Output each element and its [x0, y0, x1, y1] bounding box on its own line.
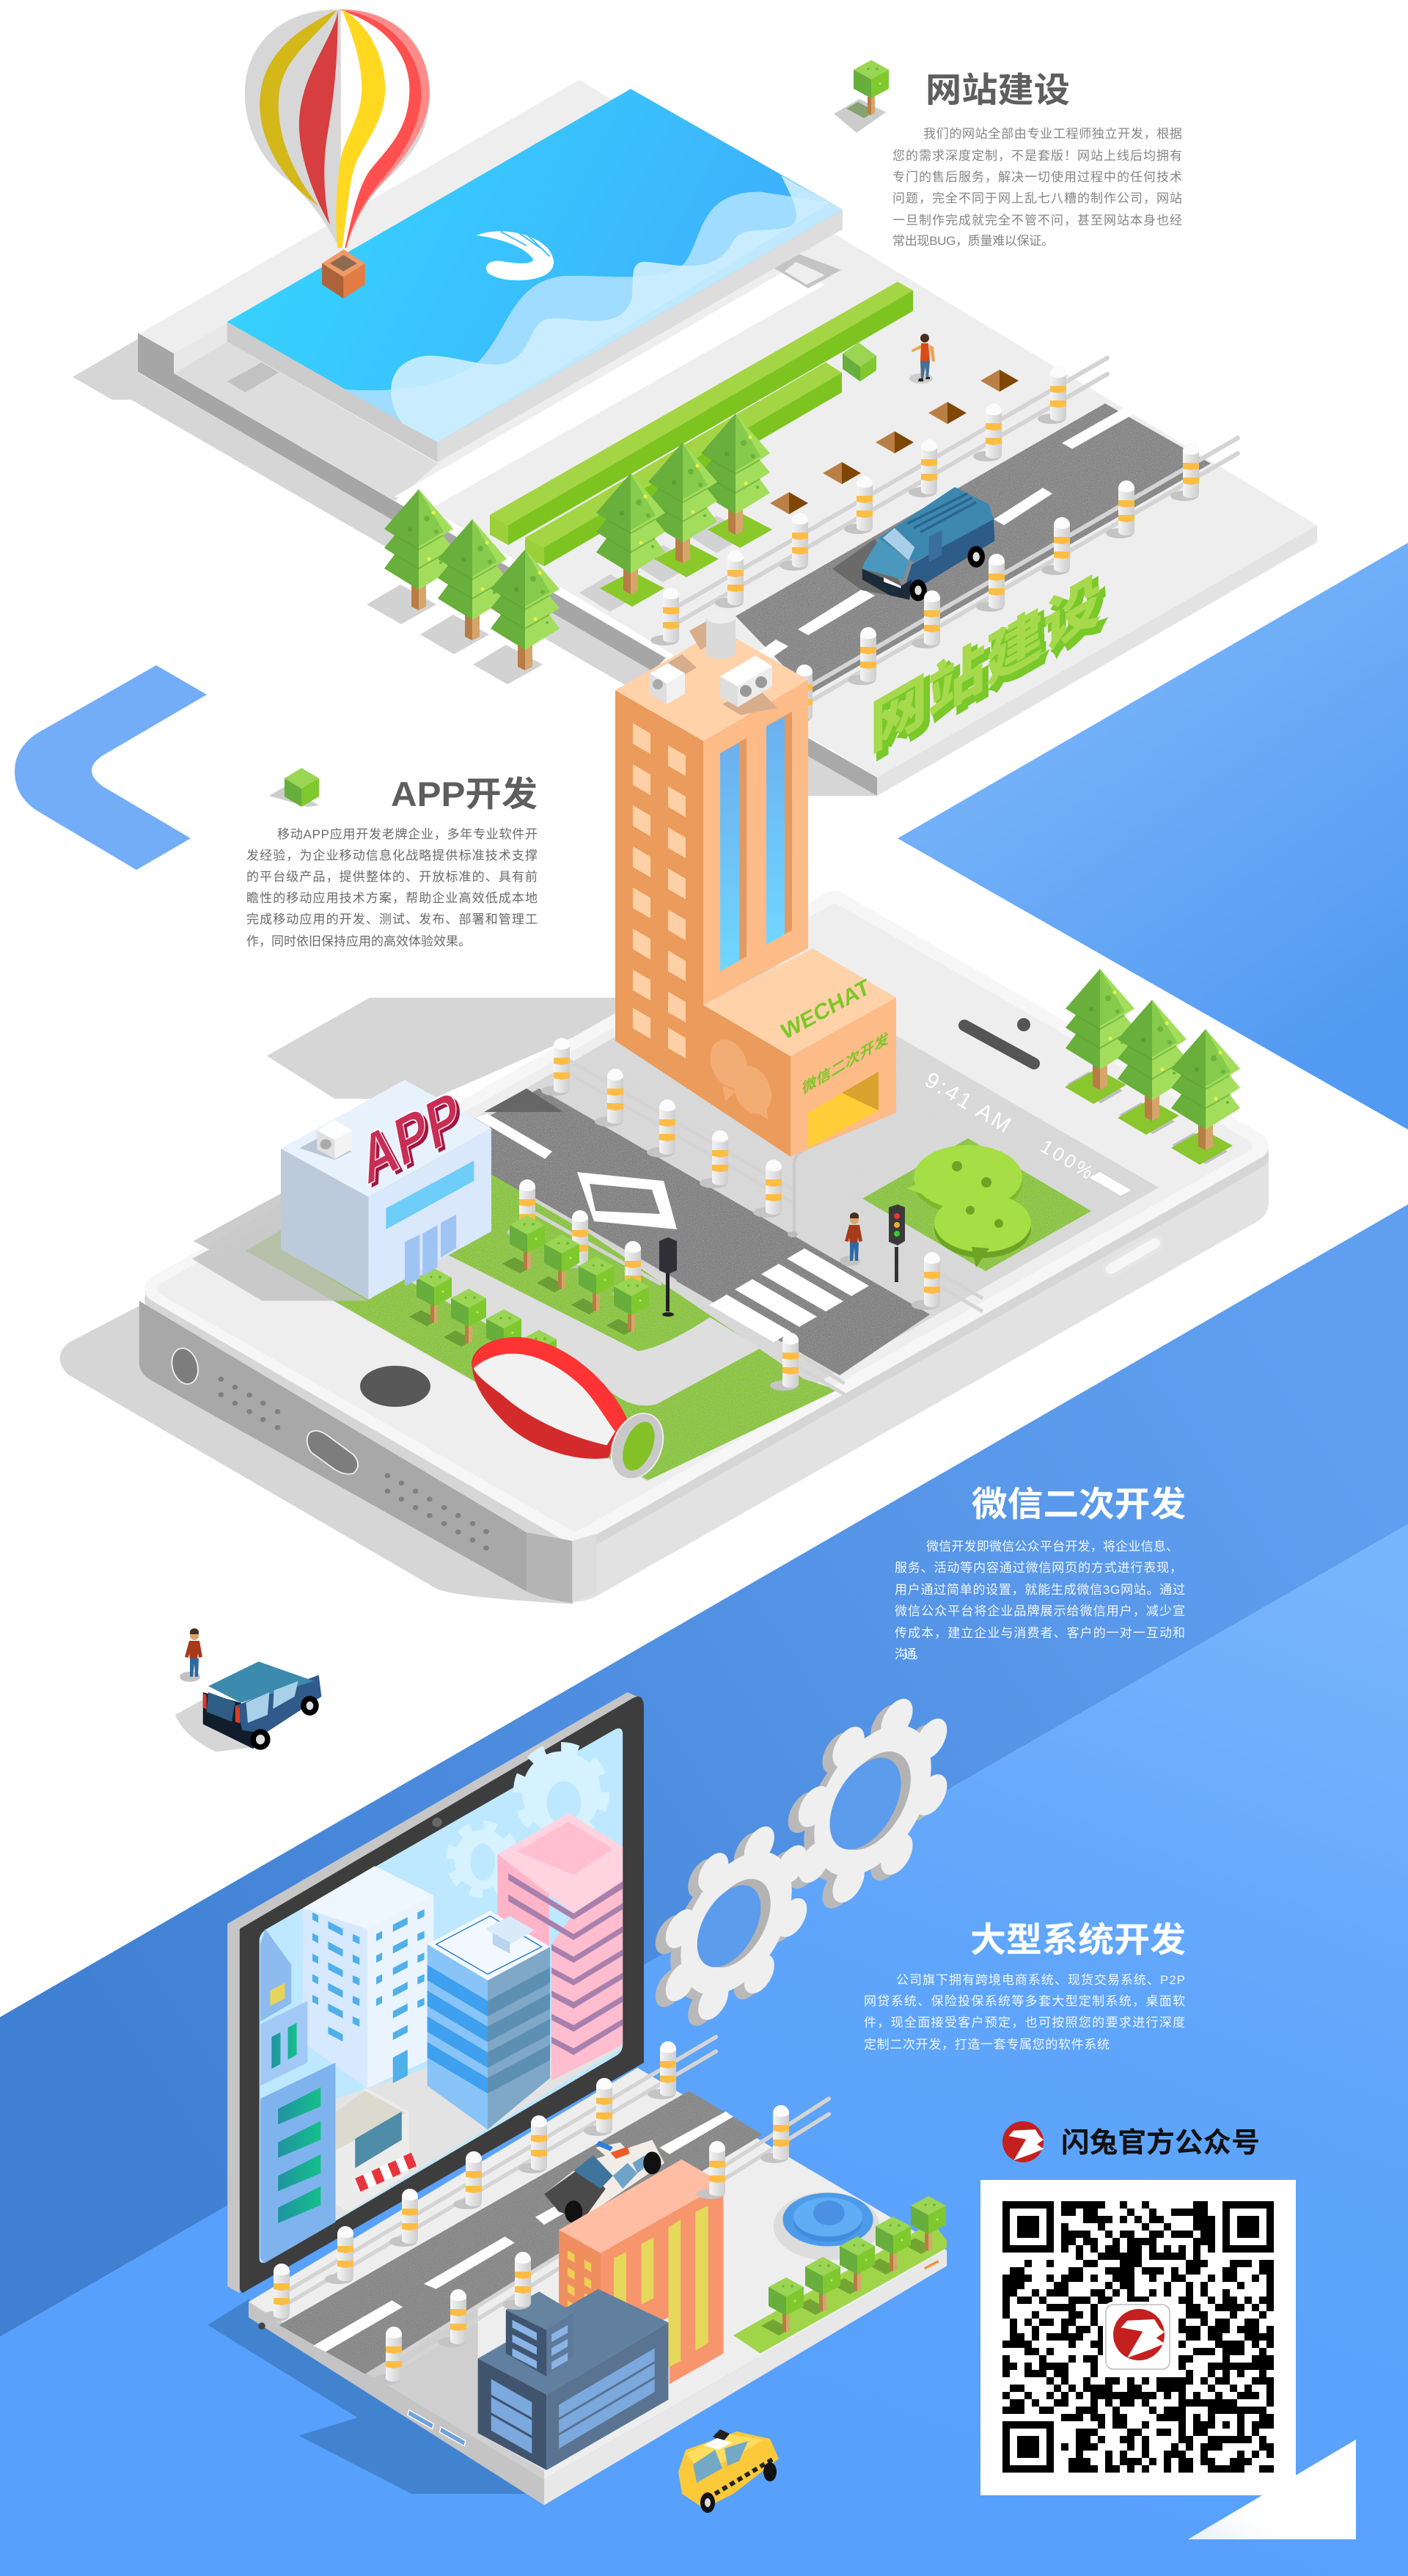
tablet shadow [208, 2299, 546, 2494]
pine trees on website platform [367, 414, 772, 684]
body copy: 问题，完全不同于网上乱七八糟的制作公司，网站 [892, 191, 1182, 205]
logo on website screen [477, 230, 554, 280]
tablet base [249, 2068, 947, 2505]
body copy [246, 827, 538, 948]
road and fence group [650, 358, 1238, 701]
3D green sign text: 网站建设 [870, 565, 1101, 764]
front fence row and road label [784, 443, 1199, 722]
heading: 微信二次开发 [972, 1485, 1186, 1523]
body copy: 件，现全面接受客户预定，也可按照您的要求进行深度 [864, 2016, 1185, 2030]
body copy [895, 1540, 1185, 1661]
section: WeChat text [895, 1485, 1186, 1661]
tower signage: 微信二次开发 [802, 1029, 889, 1098]
WeChat lawn [862, 1138, 1091, 1271]
cube trees along the lawn [409, 1215, 649, 1388]
left clock tower [260, 1929, 335, 2264]
sidewalk path [407, 1252, 760, 1405]
phone screen pavement [246, 955, 1159, 1481]
section: website text [834, 60, 1182, 248]
3D green sign text: 网站建设 [874, 569, 1106, 769]
panel: phone [60, 904, 1269, 1604]
heading: 大型系统开发 [970, 1920, 1186, 1959]
hot-air balloon [245, 10, 430, 299]
official account header [1002, 2121, 1260, 2162]
phone lower edge with ports [139, 1301, 596, 1603]
pale gears on screen [450, 1747, 604, 1893]
icon: green cube [269, 768, 319, 807]
APP red sign [355, 1075, 470, 1203]
body copy: 公司旗下拥有跨境电商系统、现货交易系统、P2P [896, 1973, 1185, 1987]
heading: 闪兔官方公众号 [1061, 2128, 1260, 2159]
QR code panel [980, 2180, 1296, 2495]
body copy: 瞻性的移动应用技术方案，帮助企业高效低成本地 [246, 891, 538, 905]
body copy: 常出现BUG，质量难以保证。 [892, 234, 1054, 248]
panel: website platform [73, 80, 1317, 796]
heading: 网站建设 [925, 70, 1070, 109]
body copy: 移动APP应用开发老牌企业，多年专业软件开 [277, 827, 538, 841]
fountain [774, 2192, 879, 2260]
app building [192, 1080, 491, 1301]
APP red sign: APP [355, 1075, 466, 1200]
small shop [336, 2087, 417, 2212]
body copy: 的平台级产品，提供整体的、开放标准的、具有前 [246, 870, 538, 884]
phone speaker, status text and button: 9:41 AM [920, 1068, 1015, 1138]
body copy [864, 1973, 1185, 2052]
phone speaker, status text and button [920, 1018, 1155, 1269]
yellow door [808, 1072, 879, 1148]
tower blue glass strips [720, 711, 792, 971]
phone fence [507, 1038, 983, 1394]
cast shadows [60, 998, 620, 1604]
traffic lights, lamp and pedestrian [659, 1152, 905, 1317]
body copy: 完成移动应用的开发、测试、发布、部署和管理工 [246, 912, 538, 926]
blue website screen slab [227, 89, 843, 462]
white office building [303, 1866, 433, 2088]
balloon basket [322, 249, 365, 299]
body copy: 网贷系统、保险投保系统等多套大型定制系统，桌面软 [864, 1994, 1185, 2008]
body copy: 传成本，建立企业与消费者、客户的一对一互动和 [895, 1626, 1185, 1640]
section: system text [864, 1920, 1186, 2052]
body copy: 您的需求深度定制，不是套版！网站上线后均拥有 [892, 149, 1182, 163]
delivery van [832, 487, 994, 601]
yellow taxi [678, 2429, 779, 2513]
QR modules [1002, 2201, 1274, 2473]
body copy: 服务、活动等内容通过微信网页的方式进行表现， [895, 1561, 1182, 1575]
roof tank and air conditioners [650, 612, 777, 715]
person and blue SUV [175, 1628, 321, 1752]
decorative white corner triangle [1188, 2440, 1356, 2539]
tablet frame [227, 1692, 644, 2293]
brown pyramids [770, 370, 1019, 514]
pine trees on phone [1065, 969, 1240, 1165]
heading: APP开发 [391, 775, 538, 813]
tablet guardrail posts [261, 2041, 789, 2385]
green lawn strip [733, 2222, 947, 2353]
body copy: 沟通。 [895, 1647, 925, 1661]
road on phone [475, 1088, 930, 1375]
body copy: 专门的售后服务，解决一切使用过程中的任何技术 [892, 169, 1182, 184]
red and white ball with ring [472, 1337, 672, 1485]
icon: tree [834, 60, 889, 133]
section: APP text [246, 768, 538, 948]
panel: tablet [208, 1692, 947, 2505]
tower signage: WECHAT [778, 974, 873, 1044]
phone speaker, status text and button: 100% [1037, 1135, 1097, 1183]
small gear [656, 1801, 807, 2052]
tower windows [633, 723, 686, 1058]
orange tower: WeChat building [615, 612, 896, 1157]
hedges [490, 282, 913, 566]
home button [360, 1366, 430, 1407]
tablet fence [282, 2037, 829, 2371]
blue glass building [428, 1911, 550, 2129]
WeChat bubbles on wall [703, 1033, 778, 1120]
tablet screen [260, 1728, 623, 2264]
dark blue office building [478, 2289, 668, 2470]
phone body [158, 904, 1269, 1602]
platform base slab [73, 80, 1317, 796]
body copy: 一旦制作完成就完全不管不问，甚至网站本身也经 [892, 213, 1182, 227]
APP red sign: APP [359, 1078, 470, 1203]
orange office building [559, 2159, 723, 2385]
body copy [892, 127, 1182, 248]
body copy: 我们的网站全部由专业工程师独立开发，根据 [923, 127, 1182, 141]
body copy: 微信公众平台将企业品牌展示给微信用户，减少宣 [895, 1604, 1185, 1618]
tower signage [778, 974, 889, 1098]
large gear [788, 1672, 947, 1935]
QR center logo [1103, 2302, 1173, 2372]
tablet cube trees [761, 2196, 946, 2335]
icon: green cube and person [843, 334, 935, 384]
grass areas [246, 1122, 837, 1480]
icon: brand logo [1002, 2121, 1044, 2162]
gears [656, 1672, 947, 2052]
body copy: 微信开发即微信公众平台开发，将企业信息、 [926, 1540, 1178, 1554]
body copy: 发经验，为企业移动信息化战略提供标准技术支撑 [246, 849, 538, 863]
body copy: 作，同时依旧保持应用的高效体验效果。 [246, 934, 471, 948]
pink tower [497, 1813, 623, 2081]
police car [544, 2140, 664, 2223]
body copy: 用户通过简单的设置，就能生成微信3G网站。通过 [895, 1583, 1185, 1597]
body copy: 定制二次开发，打造一套专属您的软件系统 [864, 2038, 1110, 2052]
